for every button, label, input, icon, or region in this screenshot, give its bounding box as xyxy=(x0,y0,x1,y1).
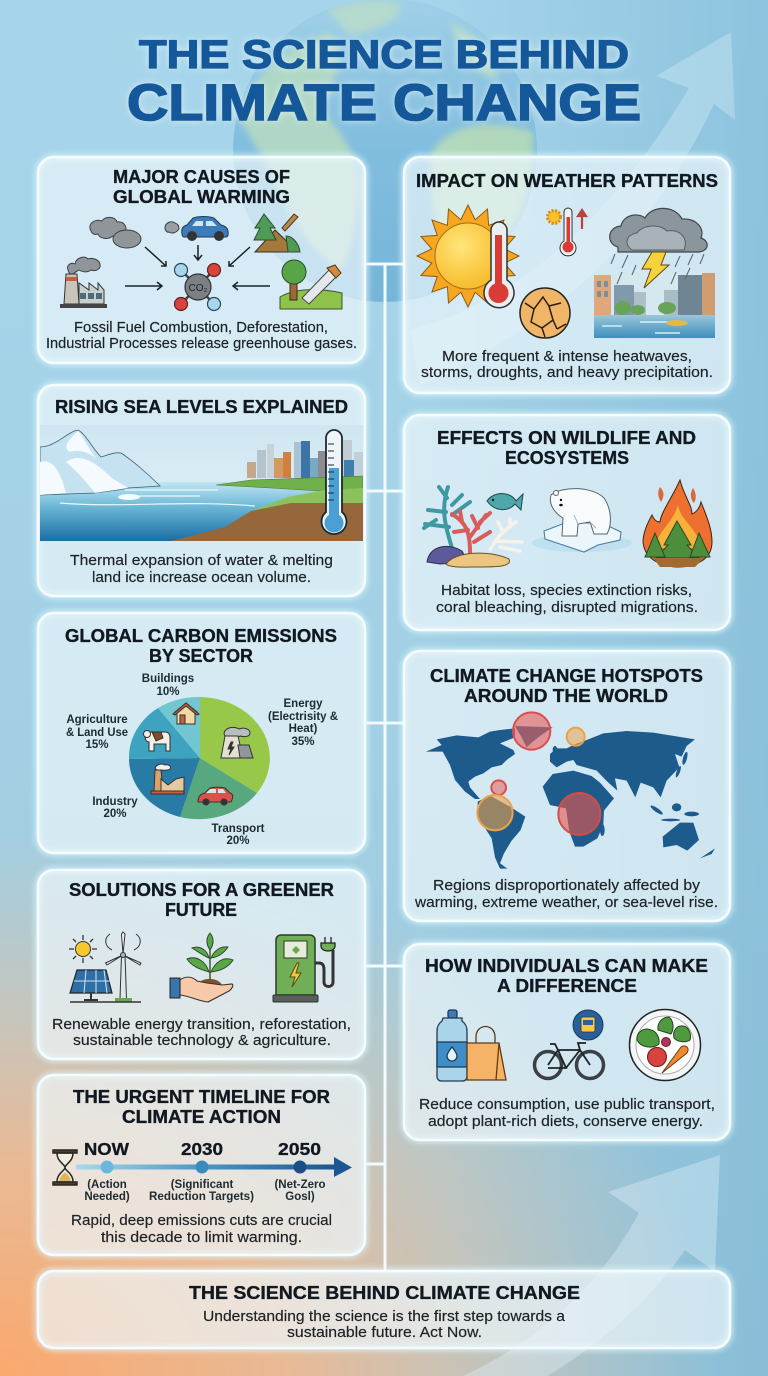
arrows into molecule xyxy=(125,245,270,290)
heading: GLOBAL WARMING xyxy=(113,187,290,207)
pie labels: Transport xyxy=(211,823,265,835)
heading xyxy=(65,626,337,666)
heading: FUTURE xyxy=(165,900,237,920)
icon: EV charger xyxy=(273,935,335,1002)
background globe xyxy=(233,0,537,302)
timeline labels: 2050 xyxy=(278,1139,321,1159)
hotspot markers xyxy=(477,712,600,835)
icon: deforestation xyxy=(254,214,300,252)
body text: warming, extreme weather, or sea-level rise. xyxy=(414,895,718,911)
icon: house xyxy=(173,703,199,724)
heading: CLIMATE CHANGE HOTSPOTS xyxy=(430,666,703,686)
icon: cow xyxy=(144,730,170,751)
icon: shopping bag xyxy=(467,1026,506,1080)
body text: Regions disproportionately affected by xyxy=(433,878,701,894)
timeline labels: NOW xyxy=(84,1139,129,1159)
heading: THE URGENT TIMELINE FOR xyxy=(73,1087,330,1107)
timeline labels: (Net-Zero xyxy=(274,1179,326,1191)
icon: cracked earth xyxy=(520,288,570,338)
pie labels: 20% xyxy=(103,808,127,820)
body text xyxy=(414,878,718,911)
heading: EFFECTS ON WILDLIFE AND xyxy=(437,428,696,448)
body text: Reduce consumption, use public transport, xyxy=(419,1097,715,1113)
background arrow: bottom right xyxy=(463,1155,720,1376)
body text: Thermal expansion of water & melting xyxy=(70,553,333,569)
pie labels xyxy=(66,673,338,847)
body text: sustainable technology & agriculture. xyxy=(73,1033,331,1049)
pie labels: & Land Use xyxy=(66,727,128,739)
icon: storm cloud, rain and lightning xyxy=(610,208,707,288)
icon: bicycle xyxy=(534,1043,604,1078)
icon: sun with thermometer xyxy=(417,205,519,308)
title: THE SCIENCE BEHIND xyxy=(139,33,629,77)
panel: timeline xyxy=(38,1075,365,1255)
panel: weather patterns xyxy=(404,157,730,393)
body text: Industrial Processes release greenhouse gases. xyxy=(46,336,357,352)
icon: smoke cloud xyxy=(90,217,141,248)
body text xyxy=(52,1017,351,1049)
pie labels: 35% xyxy=(291,736,315,748)
body text: Renewable energy transition, reforestation, xyxy=(52,1017,351,1033)
timeline arrow xyxy=(76,1157,352,1177)
icon: CO2 molecule: CO₂ xyxy=(189,283,208,294)
icon: car with exhaust xyxy=(165,216,228,241)
heading: BY SECTOR xyxy=(149,646,253,666)
icon: polar bear on ice xyxy=(532,489,632,552)
heading: GLOBAL CARBON EMISSIONS xyxy=(65,626,337,646)
icon: plate of vegetables xyxy=(630,1010,700,1080)
body text xyxy=(46,320,357,352)
footer heading: THE SCIENCE BEHIND CLIMATE CHANGE xyxy=(189,1283,580,1303)
icon: fish xyxy=(487,494,523,510)
footer text xyxy=(203,1309,566,1341)
heading: AROUND THE WORLD xyxy=(464,686,668,706)
body text: Habitat loss, species extinction risks, xyxy=(441,583,692,599)
heading xyxy=(430,666,703,706)
timeline labels xyxy=(84,1139,326,1203)
icon: flooded city xyxy=(594,273,715,338)
icon: forest fire xyxy=(643,480,712,567)
icon: factory xyxy=(60,257,107,308)
heading: IMPACT ON WEATHER PATTERNS xyxy=(416,171,718,191)
icon: power plant xyxy=(221,727,253,758)
icon: CO2 molecule xyxy=(174,264,220,310)
heading: HOW INDIVIDUALS CAN MAKE xyxy=(425,956,708,976)
icon: red car xyxy=(198,787,233,806)
central timeline connector xyxy=(365,264,404,1272)
pie labels: Buildings xyxy=(142,673,194,685)
body text: Fossil Fuel Combustion, Deforestation, xyxy=(74,320,328,336)
heading xyxy=(437,428,696,468)
body text: More frequent & intense heatwaves, xyxy=(442,349,692,365)
title: CLIMATE CHANGE xyxy=(127,74,641,131)
footer banner xyxy=(38,1271,730,1348)
panel: wildlife and ecosystems xyxy=(404,415,730,630)
icon: public transport badge xyxy=(573,1010,603,1040)
body text xyxy=(419,1097,715,1130)
body text xyxy=(421,349,713,381)
heading: RISING SEA LEVELS EXPLAINED xyxy=(55,397,348,417)
body text: coral bleaching, disrupted migrations. xyxy=(436,600,698,616)
title: CLIMATE CHANGE xyxy=(127,74,641,131)
pie chart xyxy=(129,697,270,819)
timeline labels: (Action xyxy=(87,1179,127,1191)
icon: small sun, thermometer, up arrow xyxy=(548,208,586,256)
icon: solar panel and wind turbine xyxy=(69,932,141,1002)
pie labels: Industry xyxy=(92,796,138,808)
title xyxy=(127,33,641,131)
pie labels: (Electrisity & xyxy=(268,711,338,723)
pie labels: 10% xyxy=(156,686,180,698)
body text: Rapid, deep emissions cuts are crucial xyxy=(71,1213,332,1229)
title: THE SCIENCE BEHIND xyxy=(139,33,629,77)
icon: water bottle xyxy=(437,1010,467,1081)
pie labels: 15% xyxy=(85,739,109,751)
heading: CLIMATE ACTION xyxy=(122,1107,281,1127)
pie labels: Agriculture xyxy=(66,714,128,726)
icon: thermometer xyxy=(321,430,346,534)
timeline labels: Needed) xyxy=(84,1191,130,1203)
timeline labels: Reduction Targets) xyxy=(149,1191,254,1203)
body text: adopt plant-rich diets, conserve energy. xyxy=(428,1114,703,1130)
panel: hotspots xyxy=(404,651,730,921)
icon: hourglass xyxy=(53,1150,77,1185)
panel: major causes xyxy=(38,157,365,363)
heading xyxy=(113,167,290,207)
icon: coral reef xyxy=(424,487,522,567)
timeline labels: Gosl) xyxy=(285,1191,315,1203)
heading xyxy=(425,956,708,996)
panel: solutions xyxy=(38,870,365,1059)
body text: this decade to limit warming. xyxy=(101,1230,302,1246)
heading xyxy=(73,1087,330,1127)
heading: SOLUTIONS FOR A GREENER xyxy=(69,880,334,900)
heading: MAJOR CAUSES OF xyxy=(113,167,290,187)
icon: tree and saw xyxy=(280,260,342,309)
pie labels: Energy xyxy=(284,698,323,710)
heading xyxy=(69,880,334,920)
heading: A DIFFERENCE xyxy=(497,976,637,996)
illustration: sea, iceberg and city xyxy=(40,425,363,541)
panel: rising sea levels xyxy=(38,385,365,596)
footer text: Understanding the science is the first step towards a xyxy=(203,1309,566,1325)
footer text: sustainable future. Act Now. xyxy=(287,1325,482,1341)
pie labels: Heat) xyxy=(289,723,318,735)
background arrow: top right xyxy=(410,32,735,385)
timeline labels: 2030 xyxy=(181,1139,223,1159)
icon: industry xyxy=(151,764,184,794)
heading: ECOSYSTEMS xyxy=(505,448,629,468)
body text xyxy=(436,583,698,616)
panel: carbon emissions by sector xyxy=(38,613,365,853)
body text: storms, droughts, and heavy precipitation. xyxy=(421,365,713,381)
world map xyxy=(426,712,715,869)
pie labels: 20% xyxy=(226,835,250,847)
body text xyxy=(70,553,333,586)
panel: individuals xyxy=(404,944,730,1140)
body text xyxy=(71,1213,332,1246)
body text: land ice increase ocean volume. xyxy=(92,570,311,586)
timeline labels: (Significant xyxy=(171,1179,233,1191)
icon: hand holding plant xyxy=(170,933,233,1002)
